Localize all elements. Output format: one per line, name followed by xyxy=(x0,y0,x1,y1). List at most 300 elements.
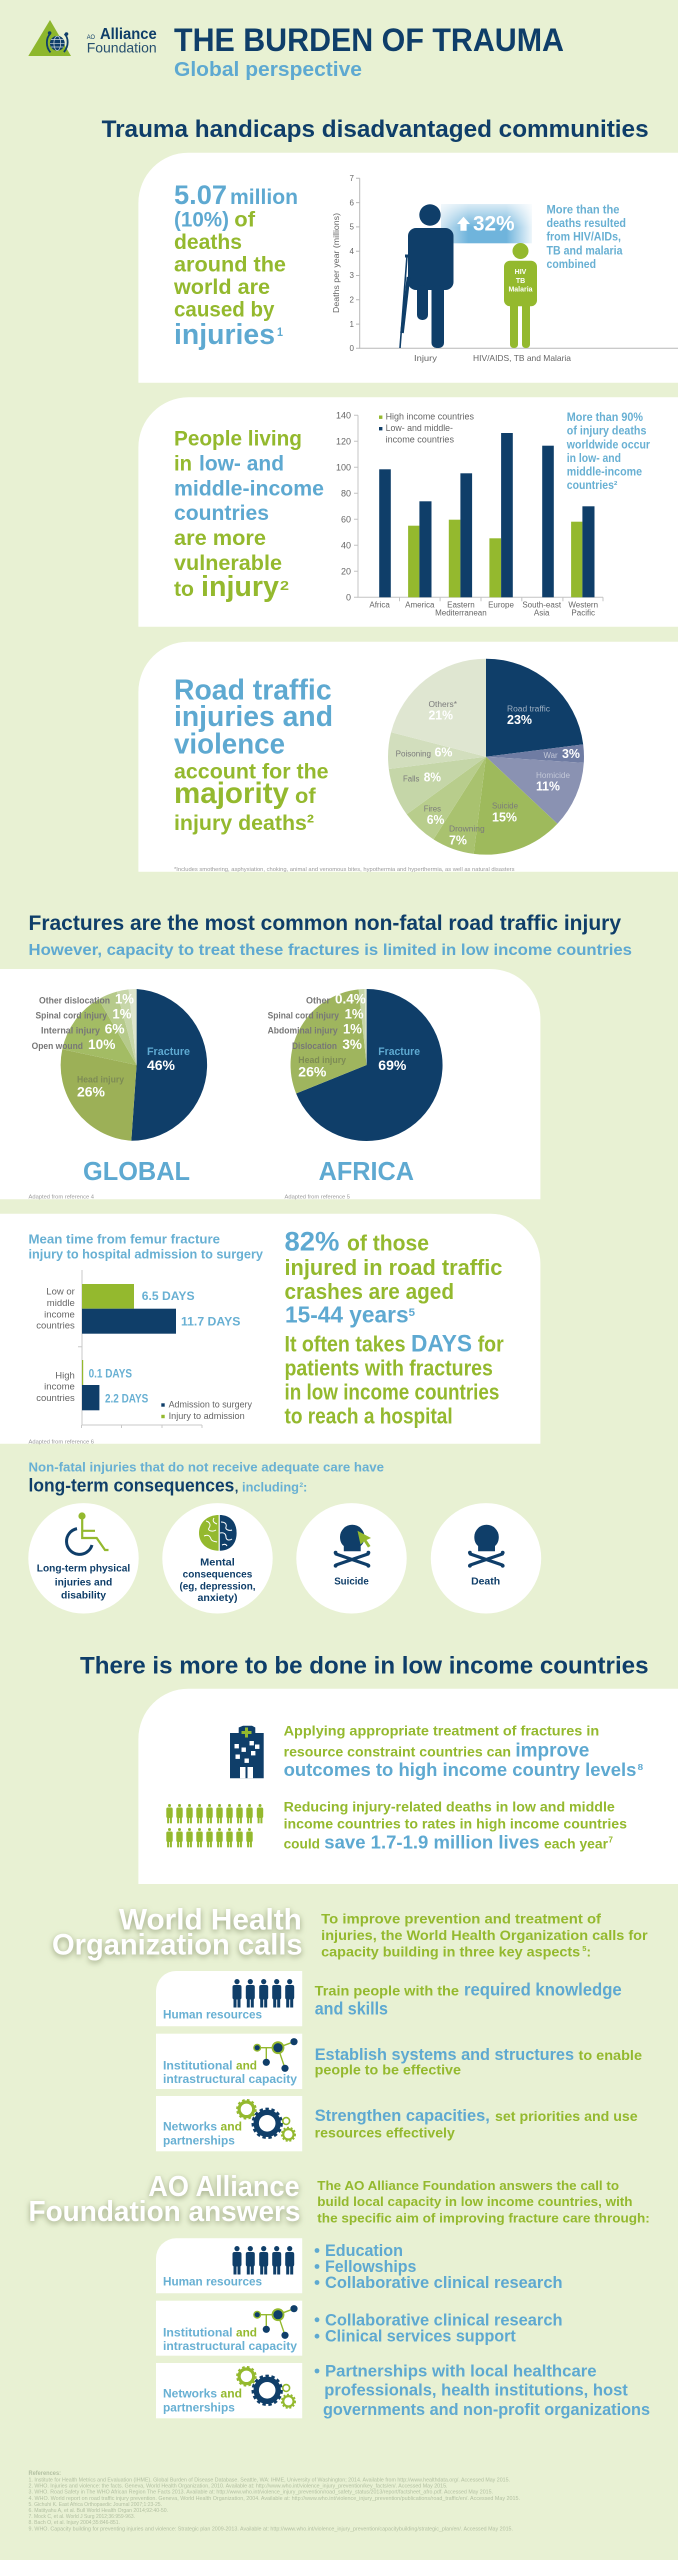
legend: Low- and middle- xyxy=(386,423,453,433)
card: networks and partnerships xyxy=(156,2096,302,2151)
chart: global pie: Other dislocation xyxy=(39,995,110,1005)
chart: global pie: Spinal cord injury xyxy=(36,1011,107,1021)
consequence: suicide: Suicide xyxy=(334,1577,369,1588)
legend: Admission to surgery xyxy=(169,1400,252,1411)
icon: HIV TB malaria person xyxy=(504,243,537,348)
list: education: Fellowships xyxy=(325,2258,416,2276)
legend: Injury to admission xyxy=(169,1411,245,1422)
chart: injury death rates by region xyxy=(336,410,603,618)
text: strengthen capacities: set priorities and use xyxy=(495,2109,638,2124)
text: train people: Train people with the xyxy=(315,1984,460,1999)
icon: skull with arrow xyxy=(334,1525,371,1568)
chart: pie of injury deaths: 15% xyxy=(492,810,517,824)
card: institutional capacity: intrastructural capacity xyxy=(163,2341,298,2353)
references: 1. Institute for Health Metrics and Evaluation (IHME). Global Burden of Disease Database. Seattle, WA: IHME, University of Washington; 2014. Available from http://www.healthdata.org/. Accessed May 2015. xyxy=(28,2478,510,2484)
references: 8. Bach O, et al. Injury 2004;35:846-851. xyxy=(28,2520,120,2526)
chart: pie of injury deaths xyxy=(388,659,584,855)
text: AO intro xyxy=(317,2178,650,2225)
consequence: death xyxy=(431,1503,541,1614)
text: more vulnerable to injury: to xyxy=(174,577,194,601)
text: save lives: each year xyxy=(544,1836,609,1851)
heading: World Health Organization calls: Organization calls xyxy=(52,1928,303,1961)
icon: HIV TB malaria person: Malaria xyxy=(508,286,533,294)
text: train people xyxy=(315,1980,622,2018)
text: save lives: save 1.7-1.9 million lives xyxy=(324,1831,540,1852)
consequence: suicide xyxy=(296,1503,407,1614)
text: AO intro: build local capacity in low income countries, with xyxy=(317,2194,633,2209)
card: institutional capacity: Institutional xyxy=(163,2327,233,2339)
chart: mean time bars: middle xyxy=(47,1298,75,1309)
consequence: physical disability: injuries and xyxy=(55,1577,112,1588)
chart: pie of injury deaths: Poisoning xyxy=(396,750,431,759)
source notes xyxy=(28,1194,350,1200)
consequence: death: Death xyxy=(471,1577,500,1588)
chart: mean time bars: countries xyxy=(36,1321,75,1332)
text: road traffic injuries: violence xyxy=(174,728,285,760)
text: WHO intro: 5 xyxy=(582,1944,586,1953)
chart: global pie: Internal injury xyxy=(41,1026,100,1036)
card: institutional capacity: and xyxy=(236,2060,257,2072)
label: AFRICA: AFRICA xyxy=(319,1156,414,1186)
heading: non-fatal injuries: 2 xyxy=(300,1482,304,1489)
references: 3. WHO. Road Safety in The WHO African Region The Facts 2013. Available at: http://www.who.int/violence_injury_prevention/road_safety_status/2013/report/factsheet_afro.pdf. Accessed May 2015. xyxy=(28,2490,493,2496)
chart: pie of injury deaths: 3% xyxy=(562,747,580,761)
heading: AO Alliance Foundation answers: AO Alliance xyxy=(148,2171,300,2203)
chart: Africa pie: Head injury xyxy=(298,1055,346,1065)
chart: mean time bars xyxy=(36,1270,252,1428)
chart: deaths per year: 5 xyxy=(350,223,355,232)
list: clinical research: Collaborative clinical research xyxy=(325,2311,562,2329)
text: more than the deaths: combined xyxy=(546,259,596,271)
consequence: mental: Mental xyxy=(200,1557,235,1568)
panel: fracture pie charts xyxy=(0,969,540,1200)
chart: pie of injury deaths: 6% xyxy=(427,813,444,827)
text: 82% of those injured xyxy=(284,1227,504,1428)
icon: HIV TB malaria person: HIV xyxy=(515,269,527,276)
source notes: Adapted from reference 5 xyxy=(284,1194,350,1200)
text: more vulnerable to injury: middle-income xyxy=(174,477,324,501)
card: human resources xyxy=(156,2238,302,2293)
heading: World Health Organization calls: World Health xyxy=(119,1903,302,1936)
text: improve outcomes xyxy=(284,1724,644,1780)
chart: injury death rates by region: 80 xyxy=(341,488,351,498)
text: train people: and skills xyxy=(315,1998,388,2018)
consequence: mental xyxy=(162,1503,273,1614)
text: 5.07 million: around the xyxy=(174,253,286,277)
heading: trauma handicaps: Trauma handicaps disadvantaged communities xyxy=(102,116,649,143)
text: save lives: Reducing injury-related deaths in low and middle xyxy=(284,1799,615,1814)
chart: injury death rates by region: 20 xyxy=(341,566,351,576)
text: 5.07 million: million xyxy=(230,186,298,209)
panel: what improvement could achieve xyxy=(138,1689,678,1884)
chart: deaths per year: 4 xyxy=(350,247,355,256)
text: more than 90%: More than 90% xyxy=(567,412,643,424)
chart: mean time bars: countries xyxy=(36,1393,75,1404)
chart: pie of injury deaths: Homicide xyxy=(536,771,571,780)
chart: mean time bars: income xyxy=(44,1309,75,1320)
chart heading: Mean time from femur fracture xyxy=(28,1232,220,1246)
chart: pie of injury deaths: War xyxy=(544,751,558,760)
chart: pie of injury deaths: Fires xyxy=(424,804,441,813)
text: establish systems: to enable xyxy=(578,2048,643,2063)
chart: pie of injury deaths: 23% xyxy=(507,713,532,727)
chart: Africa pie: 26% xyxy=(298,1064,327,1080)
chart: global pie: 1% xyxy=(112,1006,132,1022)
chart: Africa pie: Abdominal injury xyxy=(268,1026,338,1036)
chart: deaths per year: Deaths per year (millions) xyxy=(331,213,341,313)
text: 5.07 million: caused by xyxy=(174,298,275,322)
text: AO intro: The AO Alliance Foundation answers the call to xyxy=(317,2178,619,2193)
text: train people: required knowledge xyxy=(464,1980,622,2000)
card: networks and partnerships xyxy=(156,2363,302,2418)
chart: mean time bars: Low or xyxy=(46,1287,75,1298)
chart: injury death rates by region: Western xyxy=(568,601,598,610)
chart: injury death rates by region: Africa xyxy=(369,601,390,610)
text: more than the deaths: More than the xyxy=(546,204,620,216)
chart: deaths per year: 6 xyxy=(350,198,355,207)
text: 5.07 million: (10%) xyxy=(174,209,229,232)
chart: injury death rates by region: Europe xyxy=(488,601,514,610)
icon: wheelchair xyxy=(67,1512,108,1554)
text: more than 90%: worldwide occur xyxy=(566,439,650,451)
heading: AO Alliance Foundation answers: Foundation answers xyxy=(28,2196,300,2228)
icon: skull xyxy=(468,1525,505,1568)
text: 82% of those injured: 82% xyxy=(284,1227,339,1257)
chart: pie of injury deaths: 21% xyxy=(428,708,453,722)
list: education: Education xyxy=(325,2242,403,2260)
heading: non-fatal injuries: including xyxy=(242,1480,299,1495)
chart: Africa pie: 1% xyxy=(343,1021,363,1037)
legend: High income countries xyxy=(386,412,474,422)
chart: Africa pie: 69% xyxy=(378,1057,407,1073)
chart: deaths per year: 0 xyxy=(350,344,355,353)
text: improve outcomes: 8 xyxy=(638,1762,644,1772)
chart: global pie xyxy=(32,989,207,1141)
card: institutional capacity xyxy=(156,2301,302,2356)
text: 5.07 million: injuries xyxy=(174,319,275,351)
text: 82% of those injured: injured in road traffic xyxy=(284,1255,502,1280)
card: networks and partnerships: partnerships xyxy=(163,2402,235,2414)
text: 5.07 million: 1 xyxy=(277,325,283,339)
chart: pie of injury deaths: 8% xyxy=(424,771,441,785)
references: 9. WHO. Capacity building for preventing injuries and violence: Strategic plan 2009-2013. Available at: http://www.who.int/violence_injury_prevention/capacitybuilding/strategic_plan/en/. Accessed May 2015. xyxy=(28,2526,513,2532)
panel: road traffic injuries and violence xyxy=(138,642,678,873)
icon: network xyxy=(253,2305,298,2339)
text: 5.07 million: deaths xyxy=(174,230,242,254)
text: more than 90%: countries² xyxy=(567,480,618,492)
references: 7. Mock C, et al. World J Surg 2012;36:959-963. xyxy=(28,2514,135,2520)
heading: AO Alliance Foundation answers xyxy=(28,2171,300,2228)
chart: Africa pie: 0.4% xyxy=(335,990,366,1006)
icon: people xyxy=(232,2246,294,2274)
list: education xyxy=(315,2242,562,2292)
bars: low and middle income xyxy=(379,433,594,597)
consequence: mental: consequences xyxy=(183,1569,253,1580)
chart: mean time bars: 2.2 DAYS xyxy=(105,1391,148,1405)
heading: non-fatal injuries: : xyxy=(303,1480,307,1495)
icon: group of people xyxy=(166,1804,263,1847)
chart: mean time bars: 11.7 DAYS xyxy=(181,1315,240,1329)
text: road traffic injuries: injury deaths² xyxy=(174,811,314,835)
text: establish systems: people to be effective xyxy=(315,2062,462,2077)
text: 82% of those injured: to reach a hospital xyxy=(284,1403,453,1428)
chart: global pie: Head injury xyxy=(77,1075,124,1085)
card: networks and partnerships: and xyxy=(220,2389,242,2401)
icon: network xyxy=(253,2038,298,2072)
chart: deaths per year: HIV/AIDS, TB and Malaria xyxy=(473,353,571,363)
text: more than the deaths: from HIV/AIDs, xyxy=(546,232,621,244)
text: more than 90%: of injury deaths xyxy=(567,426,646,438)
bars: high income xyxy=(408,520,582,597)
chart: Africa pie: Spinal cord injury xyxy=(268,1011,339,1021)
chart: injury death rates by region: 140 xyxy=(336,410,351,420)
icon: gears xyxy=(237,2100,295,2141)
chart: pie of injury deaths: Others* xyxy=(428,700,457,709)
chart: injury death rates by region: 40 xyxy=(341,540,351,550)
references: 6. Matityahu A, et al. Bull World Health Organ 2014;92:40-50. xyxy=(28,2508,168,2514)
icon: brain xyxy=(199,1515,237,1551)
text: 5.07 million xyxy=(173,180,298,351)
text: more vulnerable to injury: 2 xyxy=(280,578,289,593)
text: road traffic injuries: injuries and xyxy=(174,701,333,733)
text: road traffic injuries xyxy=(174,674,333,835)
text: establish systems: Establish systems and structures xyxy=(315,2046,574,2064)
title: THE BURDEN OF TRAUMA xyxy=(174,22,564,58)
text: save lives xyxy=(284,1799,627,1852)
panel: time to surgery xyxy=(0,1214,540,1446)
text: more than 90%: in low- and xyxy=(567,453,621,465)
heading: non-fatal injuries xyxy=(28,1459,384,1496)
text: improve outcomes: improve xyxy=(515,1741,589,1762)
legend: income countries xyxy=(386,434,454,444)
card: institutional capacity: intrastructural capacity xyxy=(163,2074,298,2086)
text: road traffic injuries: account for the xyxy=(174,759,329,783)
heading: World Health Organization calls xyxy=(52,1903,303,1961)
text: 82% of those injured: 5 xyxy=(409,1307,415,1319)
list: partnerships: Partnerships with local healthcare xyxy=(325,2362,597,2381)
list: partnerships xyxy=(315,2362,650,2419)
chart: Africa pie xyxy=(268,989,443,1141)
chart: mean time bars: 6.5 DAYS xyxy=(142,1289,195,1303)
chart: pie of injury deaths: 6% xyxy=(434,746,452,760)
text: 5.07 million: of xyxy=(234,208,256,232)
heading: non-fatal injuries: , xyxy=(235,1480,238,1495)
text: road traffic injuries: majority xyxy=(174,777,290,810)
chart: global pie: 10% xyxy=(88,1036,116,1052)
card: human resources xyxy=(156,1971,302,2026)
text: save lives: income countries to rates in high income countries xyxy=(284,1816,627,1831)
label: GLOBAL: GLOBAL xyxy=(83,1156,190,1186)
text: more than 90% xyxy=(566,412,650,492)
text: 82% of those injured: 15-44 years xyxy=(285,1301,409,1327)
text: WHO intro: : xyxy=(586,1944,591,1959)
text: save lives: 7 xyxy=(608,1836,614,1844)
heading: non-fatal injuries: long-term consequences xyxy=(28,1476,234,1496)
logo: AO Alliance Foundation: AO xyxy=(87,34,95,41)
panel: deaths caused by injuries xyxy=(138,153,678,383)
text: 5.07 million: 5.07 xyxy=(174,180,227,210)
chart: injury death rates by region: South-east xyxy=(522,601,562,610)
chart: deaths per year: 1 xyxy=(350,320,355,329)
consequence: physical disability: Long-term physical xyxy=(37,1564,130,1575)
text: improve outcomes: Applying appropriate treatment of fractures in xyxy=(284,1724,599,1739)
chart: injury death rates by region: 0 xyxy=(346,592,351,602)
text: 82% of those injured: patients with fractures xyxy=(284,1356,493,1381)
chart: Africa pie: Dislocation xyxy=(292,1041,337,1051)
chart: injury death rates by region: 60 xyxy=(341,514,351,524)
text: more vulnerable to injury: countries xyxy=(174,501,269,525)
chart: global pie: 26% xyxy=(77,1084,106,1100)
chart: injury death rates by region: Mediterranean xyxy=(435,609,487,618)
chart: pie of injury deaths: 11% xyxy=(536,780,560,794)
chart: injury death rates by region: Eastern xyxy=(447,601,475,610)
legend xyxy=(161,1400,252,1422)
text: 5.07 million: world are xyxy=(173,275,270,299)
text: 82% of those injured: for xyxy=(478,1332,504,1357)
chart: global pie: 1% xyxy=(115,990,135,1006)
text: more vulnerable to injury: vulnerable xyxy=(174,551,282,575)
chart: injury death rates by region: America xyxy=(405,601,435,610)
text: save lives: could xyxy=(284,1836,320,1851)
callout: 32% band xyxy=(441,204,532,243)
consequence: mental: anxiety) xyxy=(198,1593,238,1604)
chart: deaths per year: 7 xyxy=(350,174,355,183)
icon: gears xyxy=(237,2367,295,2408)
chart: Africa pie: 1% xyxy=(345,1006,364,1022)
references: References: xyxy=(28,2471,61,2477)
text: 82% of those injured: crashes are aged xyxy=(284,1279,454,1304)
subheading: capacity limited: However, capacity to treat these fractures is limited in low income countries xyxy=(28,942,632,959)
text: more vulnerable to injury: People living xyxy=(174,427,302,451)
text: more vulnerable to injury: low- and xyxy=(199,452,284,476)
text: improve outcomes: resource constraint countries can xyxy=(284,1745,511,1760)
chart heading: injury to hospital admission to surgery xyxy=(28,1247,263,1261)
text: establish systems xyxy=(315,2046,643,2077)
card: networks and partnerships: Networks xyxy=(163,2122,217,2134)
chart: Africa pie: Other xyxy=(306,995,331,1005)
references: 5. Gichuhi K. East Africa Orthopaedic Journal 2007;1:23-25. xyxy=(28,2502,162,2508)
consequence: physical disability: disability xyxy=(61,1591,106,1602)
heading: non-fatal injuries: Non-fatal injuries that do not receive adequate care have xyxy=(28,1459,384,1474)
legend xyxy=(379,412,474,444)
chart: injury death rates by region: Pacific xyxy=(571,609,595,618)
chart: pie of injury deaths: 7% xyxy=(449,833,467,847)
logo: AO Alliance Foundation: Foundation xyxy=(87,39,157,55)
card: human resources: Human resources xyxy=(163,2009,262,2021)
text: road traffic injuries: of xyxy=(295,784,316,808)
chart: injury death rates by region: Asia xyxy=(534,609,550,618)
card: human resources: Human resources xyxy=(163,2276,262,2288)
chart: Africa pie: Fracture xyxy=(378,1046,420,1058)
icon: hospital xyxy=(230,1726,264,1778)
text: 82% of those injured: in low income countries xyxy=(284,1379,499,1404)
card: networks and partnerships: partnerships xyxy=(163,2135,235,2147)
list: clinical research: Clinical services support xyxy=(325,2328,516,2346)
chart heading xyxy=(28,1232,263,1261)
chart: pie of injury deaths: Road traffic xyxy=(507,705,550,714)
icon: HIV TB malaria person: TB xyxy=(516,278,525,285)
text: 82% of those injured: of those xyxy=(347,1231,429,1256)
text: more vulnerable to injury xyxy=(174,427,324,603)
logo: AO Alliance Foundation xyxy=(28,20,157,56)
text: 82% of those injured: It often takes xyxy=(284,1332,406,1357)
text: 82% of those injured: DAYS xyxy=(411,1331,472,1358)
text: improve outcomes: outcomes to high income country levels xyxy=(284,1760,636,1780)
text: strengthen capacities: resources effectively xyxy=(315,2126,455,2141)
chart: injury death rates by region: 100 xyxy=(336,462,351,472)
text: more vulnerable to injury: injury xyxy=(201,571,279,603)
list: partnerships: governments and non-profit organizations xyxy=(323,2400,650,2419)
chart: pie of injury deaths: Drowning xyxy=(449,825,485,834)
chart: global pie: 6% xyxy=(105,1021,125,1037)
subtitle: Global perspective xyxy=(174,58,362,81)
chart: deaths per year: 2 xyxy=(350,296,355,304)
heading: more to be done: There is more to be done in low income countries xyxy=(80,1652,648,1679)
source note: Adapted from reference 6 xyxy=(28,1440,94,1446)
card: institutional capacity xyxy=(156,2034,302,2089)
icon: people xyxy=(232,1979,294,2008)
chart: deaths per year xyxy=(331,174,678,363)
chart: Africa pie: 3% xyxy=(342,1036,363,1052)
footnote: *Includes smothering, asphyxiation, choking, animal and venomous bites, hypothermia and hyperthermia, as well as natural disasters xyxy=(174,867,515,873)
heading: fractures: Fractures are the most common non-fatal road traffic injury xyxy=(28,912,621,935)
chart: pie of injury deaths: Suicide xyxy=(492,802,519,811)
text: more than the deaths: TB and malaria xyxy=(546,245,623,257)
text: more than 90%: middle-income xyxy=(567,467,642,479)
text: more than the deaths: deaths resulted xyxy=(546,218,626,230)
callout: 32% band: 32% xyxy=(473,213,515,236)
list: education: Collaborative clinical research xyxy=(325,2274,562,2292)
references xyxy=(28,2471,520,2532)
text: WHO intro xyxy=(321,1912,648,1959)
card: networks and partnerships: and xyxy=(220,2122,242,2134)
card: institutional capacity: Institutional xyxy=(163,2060,233,2072)
chart: mean time bars: High xyxy=(55,1370,75,1381)
chart: deaths per year: Injury xyxy=(414,353,438,363)
text: strengthen capacities: Strengthen capacities, xyxy=(315,2106,490,2125)
chart: global pie: Open wound xyxy=(32,1041,83,1051)
list: partnerships: professionals, health institutions, host xyxy=(324,2381,628,2400)
text: road traffic injuries: Road traffic xyxy=(174,674,332,706)
icon: injured person with crutch xyxy=(400,204,454,348)
chart: deaths per year: 3 xyxy=(350,271,355,280)
card: institutional capacity: and xyxy=(236,2327,257,2339)
logo: AO Alliance Foundation: Alliance xyxy=(100,26,157,43)
source notes: Adapted from reference 4 xyxy=(28,1194,94,1200)
text: WHO intro: injuries, the World Health Organization calls for xyxy=(321,1928,648,1943)
chart: global pie: Fracture xyxy=(147,1046,190,1058)
chart: mean time bars: income xyxy=(44,1382,75,1393)
chart: injury death rates by region: 120 xyxy=(336,436,351,446)
card: networks and partnerships: Networks xyxy=(163,2389,217,2401)
consequence: mental: (eg, depression, xyxy=(180,1581,256,1592)
panel: people in low and middle income countries xyxy=(138,397,678,627)
text: more vulnerable to injury: in xyxy=(174,452,192,476)
text: WHO intro: To improve prevention and treatment of xyxy=(321,1912,602,1927)
chart: pie of injury deaths: Falls xyxy=(403,775,419,784)
text: AO intro: the specific aim of improving fracture care through: xyxy=(317,2210,650,2225)
chart: global pie: 46% xyxy=(147,1057,176,1073)
references: 2. WHO. Injuries and violence: the facts. Geneva, World Health Organization, 2010. Available at: http://www.who.int/violence_injury_prevention/key_facts/en/. Accessed May 2015. xyxy=(28,2484,447,2490)
text: more vulnerable to injury: are more xyxy=(174,526,266,550)
text: WHO intro: capacity building in three key aspects xyxy=(321,1944,580,1959)
list: clinical research xyxy=(315,2311,562,2346)
consequence: physical disability xyxy=(28,1503,139,1614)
references: 4. WHO. World report on road traffic injury prevention. Geneva, World Health Organization, 2004. Available at: http://www.who.int/violence_injury_prevention/publications/road_traffic/en/. Accessed May 2015. xyxy=(28,2496,520,2502)
text: strengthen capacities xyxy=(315,2106,638,2141)
chart: mean time bars: 0.1 DAYS xyxy=(89,1366,132,1380)
text: more than the deaths xyxy=(546,204,626,271)
